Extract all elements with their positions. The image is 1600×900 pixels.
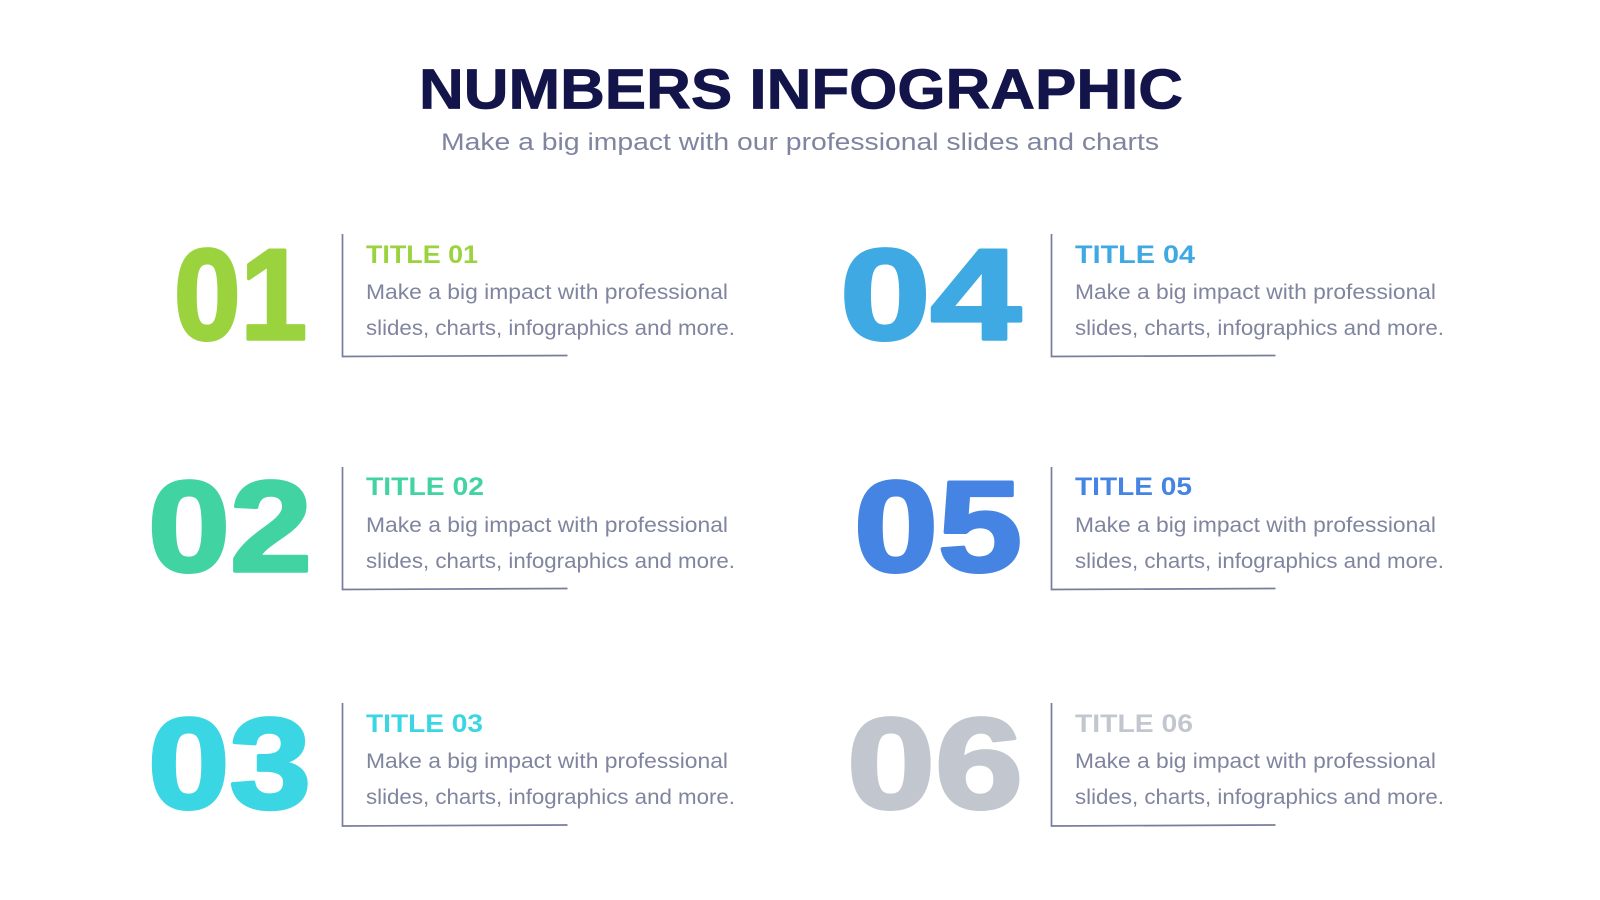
panel: item 02 xyxy=(148,455,735,599)
heading 02: TITLE 02 xyxy=(366,473,484,501)
bracket 03 xyxy=(342,703,568,826)
panel: item 01 xyxy=(174,223,735,367)
heading 01: TITLE 01 xyxy=(366,241,478,269)
heading 06: TITLE 06 xyxy=(1075,710,1193,738)
bracket 02 xyxy=(342,467,568,590)
body text 03: slides, charts, infographics and more. xyxy=(366,786,735,809)
heading 05: TITLE 05 xyxy=(1075,473,1192,501)
body text 06: Make a big impact with professional xyxy=(1075,750,1436,773)
number 02: 02 xyxy=(148,455,312,599)
body text 06: slides, charts, infographics and more. xyxy=(1075,786,1444,809)
body text 01 xyxy=(366,281,735,340)
body text 02: slides, charts, infographics and more. xyxy=(366,550,735,573)
panel: item 04 xyxy=(840,223,1444,367)
title: NUMBERS INFOGRAPHIC xyxy=(419,58,1183,122)
number 06: 06 xyxy=(847,692,1023,836)
body text 05 xyxy=(1075,514,1444,573)
subtitle: Make a big impact with our professional slides and charts xyxy=(441,129,1159,156)
body text 05: Make a big impact with professional xyxy=(1075,514,1436,537)
body text 04 xyxy=(1075,281,1444,340)
bracket 01 xyxy=(342,234,568,356)
panel: item 06 xyxy=(847,692,1444,836)
body text 05: slides, charts, infographics and more. xyxy=(1075,550,1444,573)
body text 03 xyxy=(366,750,735,809)
number 03: 03 xyxy=(148,692,311,836)
body text 02 xyxy=(366,514,735,573)
panel: item 03 xyxy=(148,692,735,836)
heading 03: TITLE 03 xyxy=(366,710,483,738)
number 05: 05 xyxy=(854,455,1022,599)
heading 04: TITLE 04 xyxy=(1075,241,1195,269)
number 04: 04 xyxy=(840,223,1021,367)
bracket 05 xyxy=(1052,467,1276,590)
bracket 04 xyxy=(1052,234,1276,356)
body text 04: Make a big impact with professional xyxy=(1075,281,1436,304)
body text 02: Make a big impact with professional xyxy=(366,514,728,537)
body text 03: Make a big impact with professional xyxy=(366,750,728,773)
body text 04: slides, charts, infographics and more. xyxy=(1075,317,1444,340)
number 01: 01 xyxy=(174,223,307,367)
bracket 06 xyxy=(1052,703,1276,826)
body text 06 xyxy=(1075,750,1444,809)
body text 01: slides, charts, infographics and more. xyxy=(366,317,735,340)
body text 01: Make a big impact with professional xyxy=(366,281,728,304)
panel: item 05 xyxy=(854,455,1444,599)
